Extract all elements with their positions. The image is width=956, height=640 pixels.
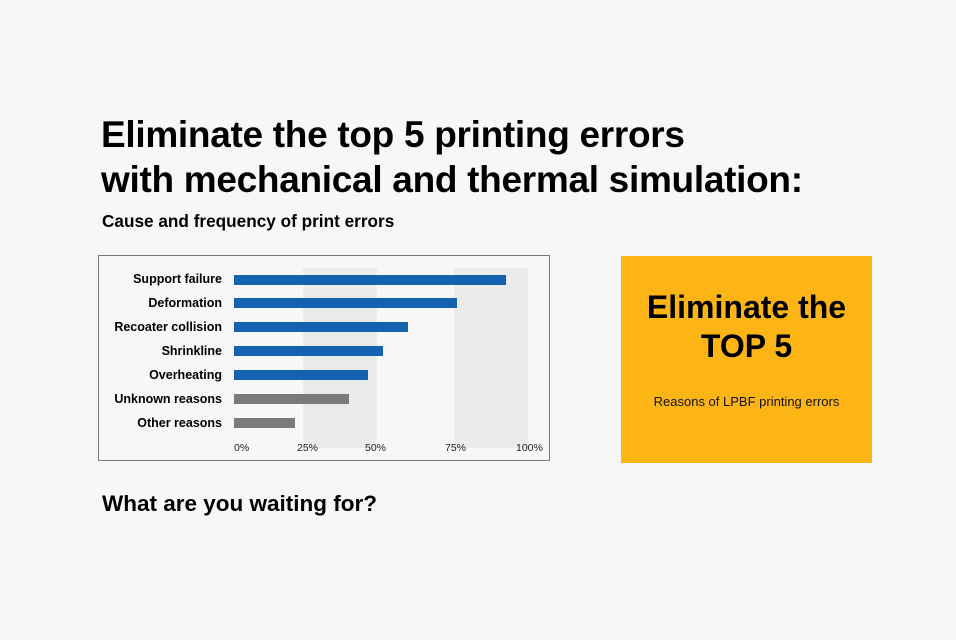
title: with mechanical and thermal simulation: (101, 159, 803, 200)
bars (234, 275, 506, 285)
callout heading: Eliminate the (647, 289, 846, 325)
bar chart panel: 50% (365, 442, 386, 454)
bar chart panel: Shrinkline (162, 344, 222, 358)
bar chart panel: Recoater collision (114, 320, 222, 334)
bar chart panel: 75% (445, 442, 466, 454)
subtitle: Cause and frequency of print errors (102, 211, 394, 231)
bar chart panel: 100% (516, 442, 543, 454)
callout heading: TOP 5 (701, 328, 792, 364)
title (100, 114, 803, 200)
closing question: What are you waiting for? (102, 491, 377, 516)
axis labels: 0% (234, 442, 249, 454)
bar chart panel: Unknown reasons (114, 392, 222, 406)
callout heading (647, 289, 846, 364)
title: Eliminate the top 5 printing errors (101, 114, 685, 155)
bar chart panel: Overheating (149, 368, 222, 382)
labels: Support failure (133, 272, 222, 286)
bar chart panel: 25% (297, 442, 318, 454)
bar chart panel: Other reasons (137, 416, 222, 430)
bar chart panel (98, 255, 550, 461)
callout text: Reasons of LPBF printing errors (654, 394, 839, 409)
callout: yellow box (621, 256, 872, 463)
bar chart panel: Deformation (148, 296, 222, 310)
